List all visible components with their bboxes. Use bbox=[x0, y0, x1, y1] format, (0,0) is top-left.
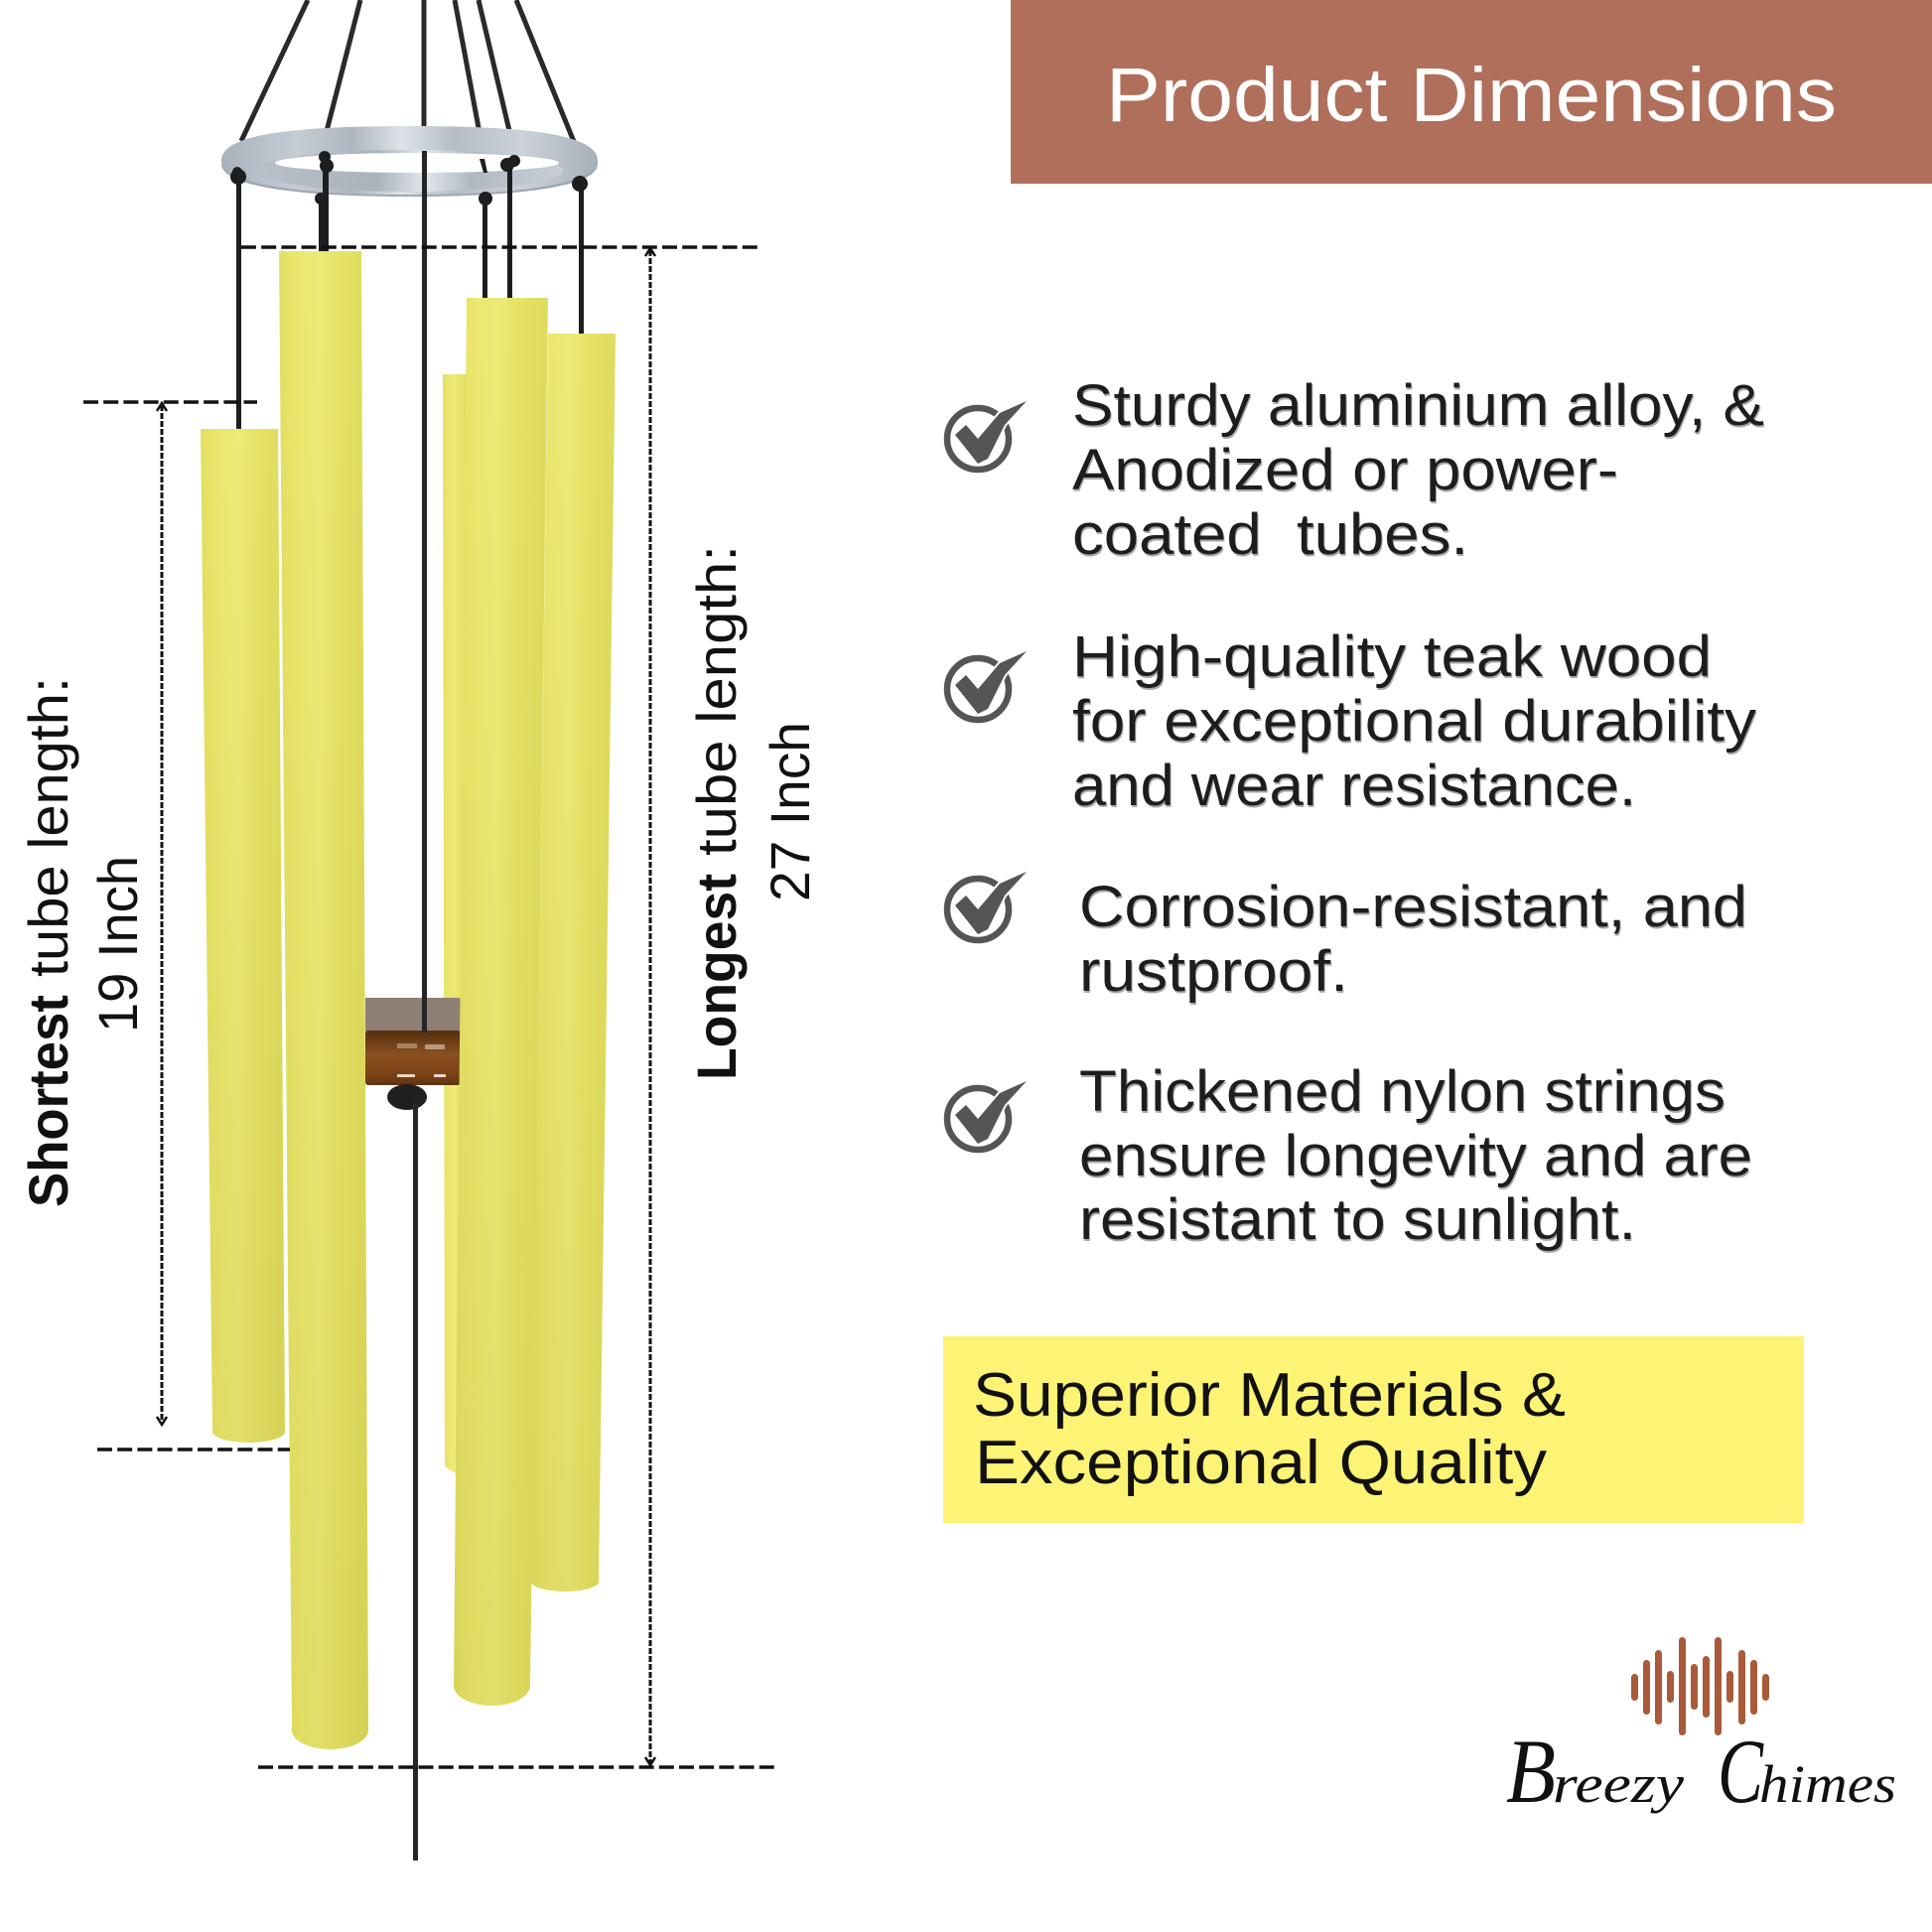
wordmark: himes bbox=[1759, 1754, 1896, 1814]
text: teak wood: and wear resistance. bbox=[1072, 754, 1636, 818]
dimension lines bbox=[83, 247, 774, 1767]
label: longest tube length: Longest bbox=[685, 874, 748, 1080]
icon: check bbox=[947, 401, 1027, 470]
tube: shortest bbox=[201, 429, 285, 1443]
text: corrosion: rustproof. bbox=[1079, 939, 1348, 1004]
wordmark: reezy bbox=[1553, 1754, 1684, 1814]
wooden disc bbox=[365, 998, 461, 1110]
wordmark: B bbox=[1506, 1721, 1556, 1822]
arrow: longest tube span bbox=[645, 248, 655, 1765]
tube: back centre bbox=[443, 374, 469, 1478]
tube: right bbox=[531, 334, 616, 1591]
icon: check bbox=[947, 651, 1027, 720]
text: teak wood: High-quality teak wood bbox=[1072, 624, 1712, 689]
arrow: shortest tube span bbox=[157, 403, 167, 1425]
text: teak wood: for exceptional durability bbox=[1072, 689, 1756, 754]
logo: Breezy Chimes bbox=[1506, 1637, 1896, 1822]
silver ring bbox=[221, 126, 598, 197]
feature: teak wood bbox=[947, 624, 1756, 818]
feature: aluminium bbox=[947, 373, 1764, 567]
text: corrosion: Corrosion-resistant, and bbox=[1079, 875, 1747, 939]
header banner: Product Dimensions bbox=[1106, 53, 1837, 138]
label: 27 inch: 27 Inch bbox=[759, 722, 821, 901]
wind chime product illustration bbox=[201, 0, 616, 1861]
label: shortest tube length: Shortest bbox=[17, 995, 79, 1207]
label: longest tube length: tube length: bbox=[685, 545, 748, 856]
text: aluminium: coated tubes. bbox=[1072, 502, 1468, 567]
icon: check bbox=[947, 872, 1027, 940]
label: 19 inch: 19 Inch bbox=[86, 856, 149, 1033]
wordmark: C bbox=[1718, 1721, 1764, 1822]
callout: superior materials: Superior Materials & bbox=[973, 1361, 1566, 1430]
callout: superior materials bbox=[943, 1336, 1804, 1523]
text: aluminium: Sturdy aluminium alloy, & bbox=[1072, 373, 1764, 438]
icon: check bbox=[947, 1081, 1027, 1150]
feature: nylon strings bbox=[947, 1059, 1752, 1252]
label: longest tube length bbox=[685, 545, 748, 1080]
label: shortest tube length: tube length: bbox=[17, 677, 79, 977]
header banner bbox=[1011, 0, 1932, 184]
tube: longest bbox=[279, 251, 368, 1749]
text: nylon strings bbox=[1079, 1059, 1752, 1252]
text: teak wood bbox=[1072, 624, 1756, 818]
text: aluminium: Anodized or power- bbox=[1072, 438, 1618, 502]
text: nylon strings: resistant to sunlight. bbox=[1079, 1187, 1636, 1252]
label: shortest tube length bbox=[17, 677, 79, 1207]
feature: corrosion bbox=[947, 872, 1747, 1004]
tube: front centre bbox=[454, 298, 548, 1706]
strings below ring and knots bbox=[230, 151, 588, 430]
strings above ring bbox=[241, 0, 577, 149]
wordmark bbox=[1506, 1721, 1896, 1822]
callout: superior materials: Exceptional Quality bbox=[975, 1429, 1547, 1497]
text: aluminium bbox=[1072, 373, 1764, 567]
text: corrosion bbox=[1079, 875, 1747, 1004]
text: nylon strings: ensure longevity and are bbox=[1079, 1124, 1752, 1188]
text: nylon strings: Thickened nylon strings bbox=[1079, 1059, 1725, 1124]
icon: sound wave bbox=[1631, 1637, 1769, 1735]
centre string bbox=[413, 151, 427, 1861]
